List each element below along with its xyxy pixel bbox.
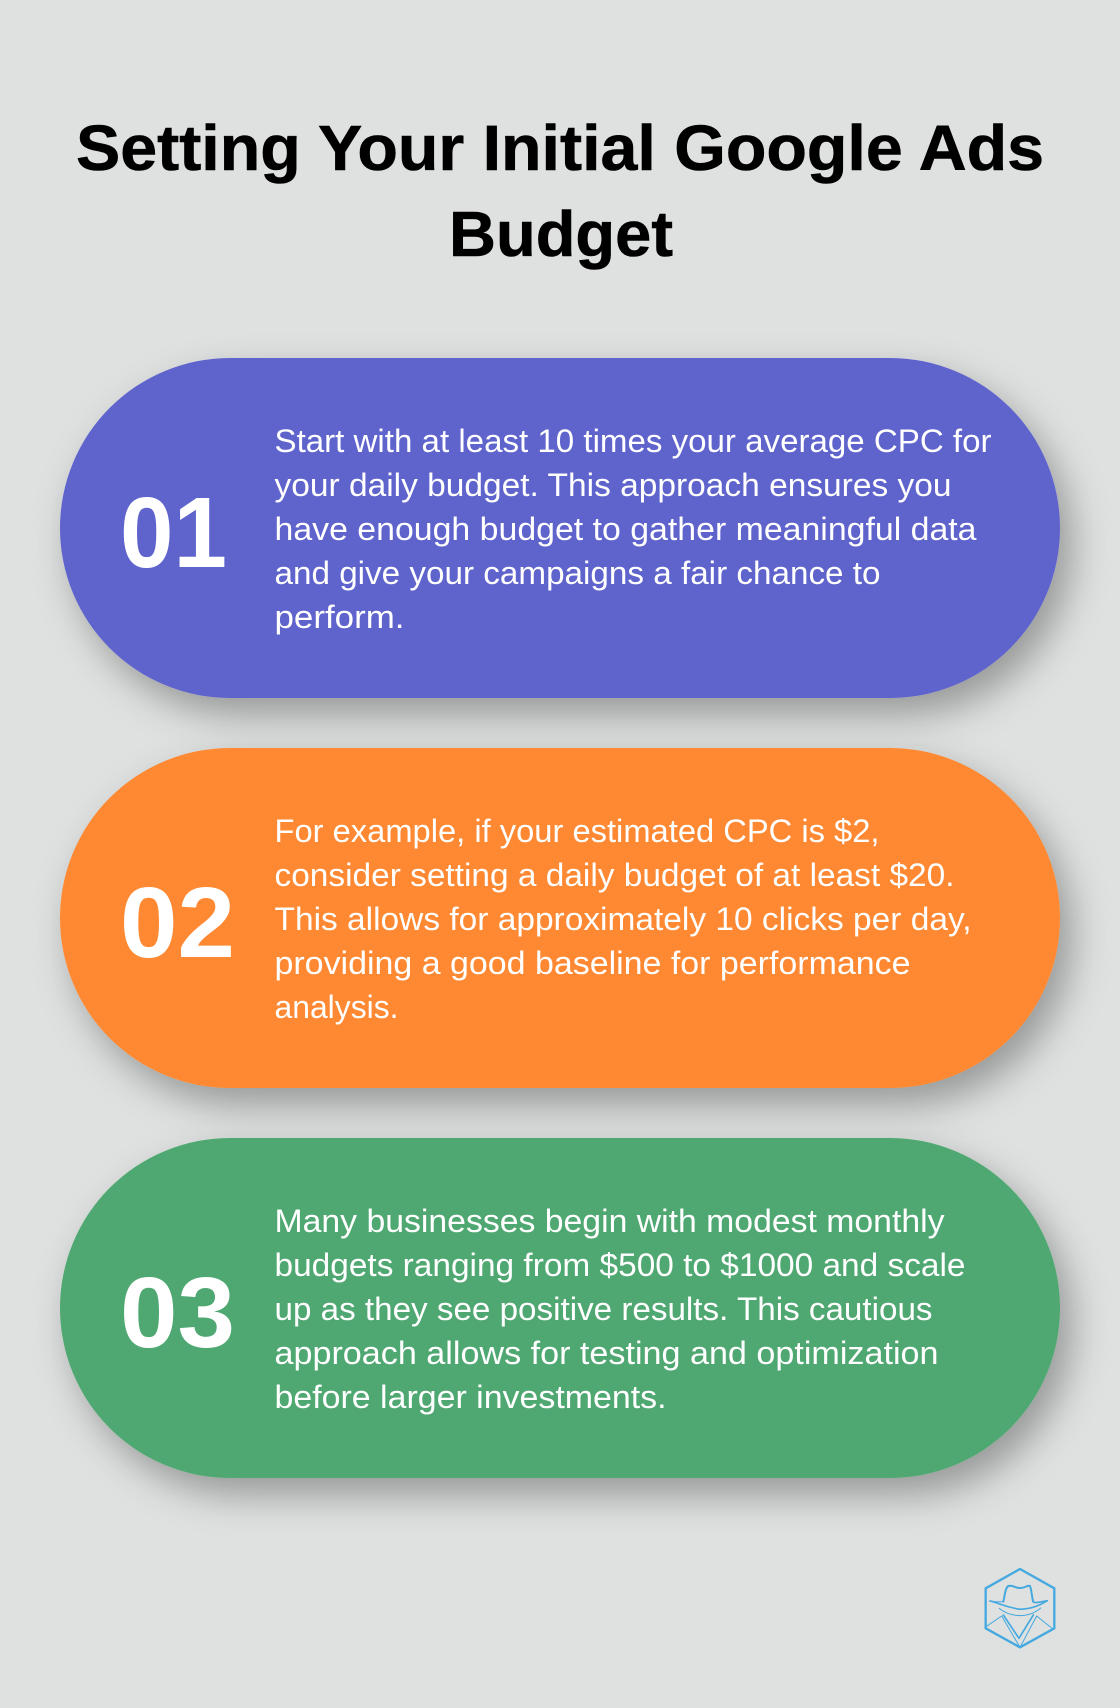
text block: step 02 [274, 813, 972, 1025]
text block: step 02: providing a good baseline for performance [274, 945, 911, 981]
text block: step 01: have enough budget to gather meaningful data [274, 511, 977, 547]
text block: step 01: and give your campaigns a fair chance to [274, 555, 880, 591]
text block: step 03: up as they see positive results. This cautious [274, 1291, 932, 1327]
text block: step 02: For example, if your estimated CPC is $2, [274, 813, 880, 849]
text block: step 02: consider setting a daily budget of at least $20. [274, 857, 954, 893]
pill: step 01 background [60, 358, 1060, 698]
panel: step 01 [60, 358, 1060, 698]
panel: step 03 [60, 1138, 1060, 1478]
number: 01: 01 [120, 477, 227, 589]
text block: step 03 [274, 1203, 965, 1415]
number: 03: 03 [120, 1257, 235, 1369]
text block: step 01: perform. [274, 599, 404, 635]
title: Budget [449, 198, 673, 270]
panel: step 02 [60, 748, 1060, 1088]
pill: step 03 background [60, 1138, 1060, 1478]
title: Setting Your Initial Google Ads [76, 112, 1044, 184]
text block: step 03: before larger investments. [274, 1379, 666, 1415]
text block: step 02: analysis. [274, 989, 398, 1025]
text block: step 03: budgets ranging from $500 to $1000 and scale [274, 1247, 965, 1283]
text block: step 01: Start with at least 10 times your average CPC for [274, 423, 992, 459]
pill: step 02 background [60, 748, 1060, 1088]
text block: step 03: Many businesses begin with modest monthly [274, 1203, 944, 1239]
text block: step 01 [274, 423, 992, 635]
icon: hexagon logo with hat and coat [985, 1569, 1054, 1647]
number: 02: 02 [120, 867, 235, 979]
text block: step 02: This allows for approximately 10 clicks per day, [274, 901, 972, 937]
text block: step 01: your daily budget. This approach ensures you [274, 467, 952, 503]
title [76, 112, 1044, 270]
text block: step 03: approach allows for testing and optimization [274, 1335, 938, 1371]
